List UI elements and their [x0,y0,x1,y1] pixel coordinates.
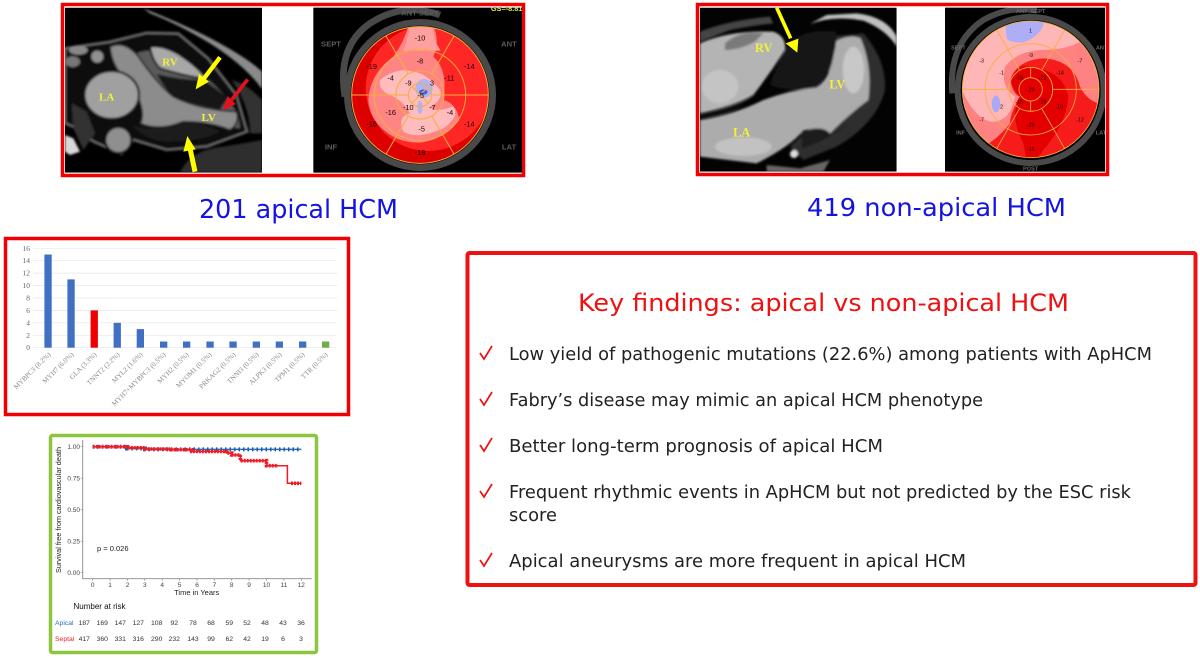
table: number at risk: 19 [261,636,269,643]
table: number at risk: 232 [169,636,180,643]
chart: non-apical polar strain map: 1 [1029,29,1032,35]
chart: gridlines and y axis: 0 [26,343,30,352]
table: number at risk: 99 [207,636,215,643]
chart: gene labels: TTR (0.5%) [300,350,330,381]
chart: non-apical polar strain map: -15 [1027,147,1035,153]
chart: axes: 8 [230,582,234,589]
chart: apical polar strain map [313,8,522,173]
table: number at risk: 92 [171,620,178,627]
table: number at risk: 360 [97,636,108,643]
chart: non-apical polar strain map: 2 [1000,105,1003,111]
chart: apical polar strain map: ANT [501,39,517,48]
chart: non-apical polar strain map [945,8,1105,172]
chart: gene labels: GLA (3.3%) [68,350,99,381]
finding 5: Apical aneurysms are more frequent in apical HCM [509,551,966,572]
chart: axes: 9 [247,582,251,589]
chart: gridlines and y axis: 14 [22,256,30,265]
heading: 201 apical HCM: 201 apical HCM [199,195,398,225]
table: number at risk: 3 [299,636,303,643]
chart: apical polar strain map: LAT [502,142,516,151]
chart: axes: 1.00 [67,444,80,451]
image: apical HCM cardiac MRI: LV [202,112,216,124]
chart: gene labels: ALPK3 (0.5%) [248,350,284,387]
chart: non-apical polar strain map: -29 [1027,87,1035,93]
chart: gene labels: MYOM1 (0.5%) [174,350,214,390]
chart: apical polar strain map: INF [325,142,337,151]
panel: key findings [468,253,1196,585]
heading: 419 non-apical HCM: 419 non-apical HCM [807,193,1066,222]
chart: non-apical polar strain map: ANT [1096,45,1108,51]
table: number at risk: 127 [133,620,144,627]
chart: non-apical polar strain map: SEPT [951,45,966,51]
chart: non-apical polar strain map: -15 [1015,76,1023,82]
table: number at risk: 316 [133,636,144,643]
table: number at risk: 6 [281,636,285,643]
chart: gene labels: MYL2 (1.6%) [110,350,145,385]
panel: survival curve [50,436,316,652]
finding 2: Fabry’s disease may mimic an apical HCM phenotype [509,390,983,411]
table: number at risk: 62 [226,636,233,643]
chart: non-apical polar strain map: -16 [1015,100,1023,106]
heading: key findings: Key findings: apical vs non-apical HCM [578,289,1069,317]
chart: gene labels: MYH7 (6.0%) [41,350,76,385]
chart: apical polar strain map: -4 [387,74,394,83]
chart: axes: 0 [91,582,95,589]
chart: gridlines and y axis: 8 [26,294,30,302]
chart: non-apical polar strain map: -28 [1027,122,1035,128]
image: non-apical HCM cardiac MRI: RV [755,41,772,55]
chart: axes: Survival free from cardiovascular death [54,447,63,573]
table: number at risk: 42 [243,636,251,643]
chart: axes: 6 [195,582,199,589]
table: number at risk: Number at risk [74,602,127,611]
table: number at risk: 290 [151,636,163,643]
chart: apical polar strain map: ANT SEPT [401,9,439,18]
table: number at risk: 59 [226,620,233,627]
chart: gridlines and y axis [22,244,337,352]
chart: apical polar strain map: -14 [464,119,475,128]
chart: non-apical polar strain map: -7 [979,117,984,123]
chart: non-apical polar strain map: LAT [1096,130,1107,136]
chart: axes: 10 [263,582,270,589]
chart: gridlines and y axis: 2 [26,331,30,340]
chart: axes: 0.25 [67,538,80,546]
table: number at risk: 52 [243,620,251,627]
chart: non-apical polar strain map: ANT_SEPT [1016,9,1046,15]
table: number at risk: 417 [79,636,90,643]
chart: axes: 4 [160,582,164,589]
chart: gene labels: PRKAG2 (0.5%) [198,350,238,391]
chart: apical polar strain map: -10 [403,103,414,112]
chart: axes: 1 [108,582,112,589]
table: number at risk: 143 [187,636,199,643]
chart: axes: 0.50 [67,507,80,514]
chart: apical polar strain map: -16 [385,108,396,117]
chart: gene labels: TPM1 (0.5%) [273,350,307,384]
finding 1: Low yield of pathogenic mutations (22.6%) among patients with ApHCM [509,344,1152,365]
image: non-apical HCM cardiac MRI: LA [733,125,750,139]
table: number at risk: Apical [55,620,74,627]
chart: gene labels: TNNI3 (0.5%) [226,350,261,386]
image: non-apical HCM cardiac MRI: LV [829,77,845,91]
panel: gene mutation bar chart [6,238,348,414]
chart: axes: 11 [281,582,288,589]
table: number at risk: 187 [79,620,90,627]
panel: apical HCM imaging [62,1,529,179]
chart: axes: Time in Years [174,588,220,597]
chart: gene bars [44,254,329,348]
chart: apical polar strain map: -5 [417,91,424,100]
chart: apical polar strain map: 3 [430,79,434,88]
chart: Kaplan-Meier curves [93,447,301,483]
chart: gene labels: MYH2 (0.5%) [156,350,191,385]
finding 3: Better long-term prognosis of apical HCM [509,436,883,457]
image: apical HCM cardiac MRI: RV [162,56,178,68]
chart: non-apical polar strain map: -7 [1078,59,1082,65]
chart: non-apical polar strain map: -1 [999,71,1004,77]
chart: non-apical polar strain map: -9 [1028,53,1033,59]
finding 4 [480,482,1132,526]
table: number at risk: 108 [151,620,163,627]
chart: axes: 3 [143,582,147,589]
finding 4: Frequent rhythmic events in ApHCM but not predicted by the ESC risk [509,482,1132,503]
chart: apical polar strain map: -16 [366,119,377,128]
finding 4: score [509,505,557,526]
chart: axes: 12 [298,582,305,589]
table: number at risk [55,602,305,643]
table: number at risk: 48 [261,620,269,627]
image: apical HCM cardiac MRI: LA [99,91,114,103]
table: number at risk: 331 [115,636,126,643]
table: number at risk: 147 [115,620,126,627]
chart: non-apical polar strain map: -12 [1076,117,1084,123]
chart: axes: 0.00 [67,570,80,577]
chart: axes: 5 [178,582,182,589]
table: number at risk: Septal [55,636,75,643]
chart: apical polar strain map: -7 [429,103,436,112]
chart: gene labels: MYH7+MYBPC3 (0.5%) [110,350,168,408]
chart: non-apical polar strain map: -14 [1056,71,1064,77]
chart: apical polar strain map: -18 [415,148,425,157]
chart: apical polar strain map: -14 [464,62,475,71]
chart: apical polar strain map: GS=-8.81 [491,4,522,13]
chart: apical polar strain map: -10 [415,34,425,43]
table: number at risk: 36 [297,620,305,627]
chart: axes: 7 [213,582,217,589]
chart: non-apical polar strain map: -25 [1039,100,1047,106]
chart: gridlines and y axis: 4 [26,318,30,327]
chart: gridlines and y axis: 10 [22,281,30,290]
chart: axes [54,440,312,597]
chart: non-apical polar strain map: -3 [979,59,984,65]
chart: apical polar strain map: -11 [444,74,454,83]
image: non-apical HCM cardiac MRI [700,8,897,172]
chart: apical polar strain map: -8 [417,56,423,65]
chart: axes: 2 [126,582,130,589]
table: number at risk: 78 [189,620,197,627]
chart: non-apical polar strain map: -19 [1055,105,1063,111]
chart: axes: 0.75 [67,476,80,482]
text: p value: p = 0.026 [97,544,128,553]
chart: apical polar strain map: -5 [418,125,425,134]
chart: gene labels: TNNT2 (2.2%) [85,350,122,387]
chart: gridlines and y axis: 12 [22,269,30,278]
table: number at risk: 43 [279,620,287,627]
chart: non-apical polar strain map: INF [956,130,966,136]
chart: apical polar strain map: -19 [366,62,377,71]
chart: apical polar strain map: -9 [405,79,412,88]
chart: gridlines and y axis: 16 [22,244,30,253]
image: apical HCM cardiac MRI [65,8,262,173]
chart: apical polar strain map: SEPT [321,39,341,48]
table: number at risk: 68 [207,620,215,627]
chart: non-apical polar strain map: POST [1023,166,1039,172]
chart: gridlines and y axis: 6 [26,306,30,315]
chart: non-apical polar strain map: -21 [1039,76,1047,82]
chart: gene labels [12,350,330,408]
chart: gene labels: MYBPC3 (8.2%) [12,350,53,391]
chart: apical polar strain map: -4 [447,108,453,117]
table: number at risk: 169 [97,620,108,627]
panel: non-apical HCM imaging [698,1,1112,178]
